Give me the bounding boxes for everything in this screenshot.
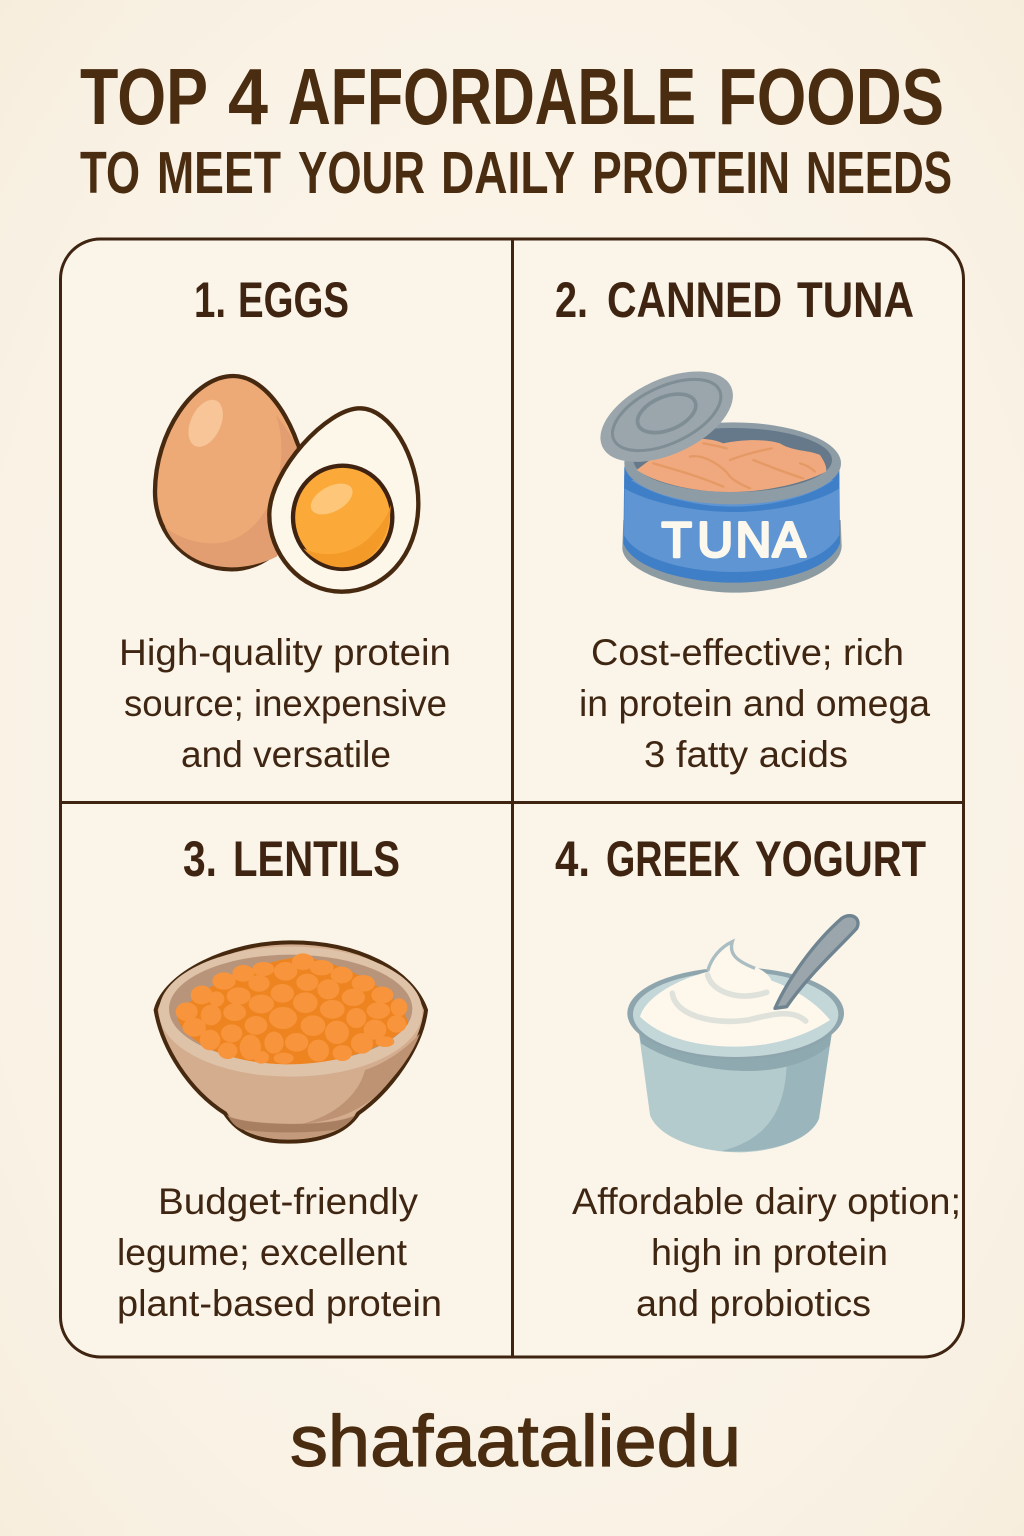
title: AFFORDABLE [288, 52, 696, 141]
heading: lentils [183, 831, 400, 887]
heading: canned tuna: TUNA [797, 272, 914, 328]
title: FOODS [718, 52, 944, 141]
description: greek yogurt: high in protein [651, 1232, 888, 1273]
title: DAILY [441, 140, 575, 206]
description: canned tuna: Cost-effective; rich [591, 632, 904, 673]
description: canned tuna: 3 fatty acids [644, 734, 848, 775]
heading: lentils: 3. [183, 831, 217, 887]
description: lentils: plant-based protein [117, 1283, 442, 1324]
heading: eggs: EGGS [238, 272, 349, 328]
description: greek yogurt: and probiotics [636, 1283, 871, 1324]
icon: yogurt cup [627, 916, 858, 1152]
description: eggs: High-quality protein [119, 632, 451, 673]
description: eggs: and versatile [181, 734, 391, 775]
icon: eggs [155, 376, 418, 592]
description: lentils [117, 1181, 442, 1324]
heading: canned tuna [555, 272, 914, 328]
description: eggs: source; inexpensive [124, 683, 447, 724]
title: NEEDS [806, 140, 952, 206]
panel: greek yogurt [514, 804, 963, 1356]
description: greek yogurt [572, 1181, 961, 1324]
title: TO [80, 140, 140, 206]
heading: greek yogurt: YOGURT [755, 831, 926, 887]
description: lentils: legume; excellent [117, 1232, 408, 1273]
panel: eggs [62, 241, 511, 801]
description: canned tuna: in protein and omega [579, 683, 930, 724]
description: canned tuna [579, 632, 930, 775]
footer brand: shafaataliedu [290, 1402, 741, 1482]
heading: canned tuna: CANNED [607, 272, 782, 328]
description: lentils: Budget-friendly [158, 1181, 419, 1222]
icon: tuna can [587, 353, 842, 593]
title: PROTEIN [592, 140, 790, 206]
heading: greek yogurt: 4. [555, 831, 590, 887]
description: eggs [119, 632, 451, 775]
heading: greek yogurt [555, 831, 926, 887]
heading: eggs [194, 272, 349, 328]
heading: canned tuna: 2. [555, 272, 588, 328]
icon: lentil bowl [156, 942, 426, 1142]
heading: eggs: 1. [194, 272, 226, 328]
heading: greek yogurt: GREEK [606, 831, 740, 887]
description: greek yogurt: Affordable dairy option; [572, 1181, 961, 1222]
title: TOP [80, 52, 208, 141]
title: 4 [228, 52, 268, 141]
icon: tuna can: TUNA [662, 513, 806, 568]
panel grid [60, 239, 964, 1357]
panel: lentils [62, 804, 511, 1356]
title [80, 52, 952, 206]
heading: lentils: LENTILS [233, 831, 400, 887]
title: YOUR [298, 140, 425, 206]
title: MEET [157, 140, 281, 206]
panel: canned tuna [514, 241, 963, 801]
